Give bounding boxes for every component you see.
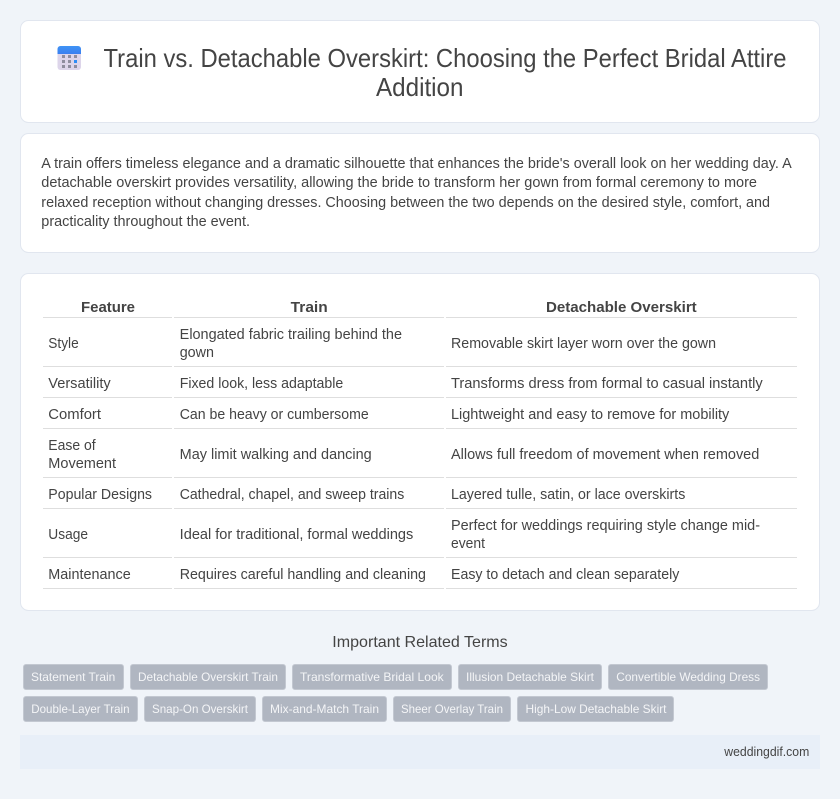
- tag: convertible wedding dress: [608, 664, 768, 690]
- icon: calendar: [58, 46, 81, 70]
- row: ease of movement: Movement: [48, 456, 116, 472]
- tag: illusion detachable skirt: Illusion Detachable Skirt: [466, 670, 595, 684]
- tag: transformative bridal look: Transformative Bridal Look: [300, 670, 445, 684]
- tag: detachable overskirt train: [130, 664, 286, 690]
- tag: high-low detachable skirt: [518, 696, 674, 722]
- row: comfort: [43, 407, 797, 429]
- row: usage: Perfect for weddings requiring style change mid-: [451, 518, 760, 534]
- row: versatility: Transforms dress from formal to casual instantly: [451, 376, 764, 392]
- title: [104, 45, 786, 102]
- intro text block: detachable overskirt provides versatility, allowing the bride to transform her gown from formal ceremony to more: [41, 175, 757, 191]
- row: style: Style: [48, 336, 79, 352]
- tag: statement train: Statement Train: [31, 670, 115, 684]
- row: popular designs: Layered tulle, satin, or lace overskirts: [451, 487, 685, 503]
- row: ease of movement: Ease of: [48, 438, 97, 454]
- row: versatility: Fixed look, less adaptable: [180, 376, 343, 392]
- tag: statement train: [24, 664, 124, 690]
- row: usage: Usage: [48, 527, 88, 543]
- intro text block: A train offers timeless elegance and a dramatic silhouette that enhances the bride's overall look on her wedding day. A: [41, 156, 792, 172]
- row: versatility: [43, 376, 797, 398]
- tag list: [24, 664, 768, 722]
- intro text block: relaxed reception without changing dresses. Choosing between the two depends on the desired style, comfort, and: [41, 195, 770, 211]
- row: ease of movement: Allows full freedom of movement when removed: [451, 447, 759, 463]
- title: Train vs. Detachable Overskirt: Choosing the Perfect Bridal Attire: [104, 45, 786, 73]
- table header row: Train: [291, 300, 328, 316]
- intro text block: practicality throughout the event.: [41, 214, 250, 230]
- title: Addition: [376, 74, 464, 102]
- tag: mix-and-match train: [262, 696, 386, 722]
- row: comfort: Comfort: [48, 407, 101, 423]
- panel: comparison table: [20, 274, 820, 610]
- row: maintenance: Easy to detach and clean separately: [451, 567, 680, 583]
- row: maintenance: Requires careful handling and cleaning: [180, 567, 426, 583]
- tag: double-layer train: Double-Layer Train: [31, 702, 129, 716]
- tag: mix-and-match train: Mix-and-Match Train: [270, 702, 379, 716]
- table header row: [43, 300, 797, 318]
- row: popular designs: Popular Designs: [48, 487, 152, 503]
- tag: high-low detachable skirt: High-Low Detachable Skirt: [526, 702, 667, 716]
- footer source text: weddingdif.com: [723, 744, 809, 759]
- tag: snap-on overskirt: Snap-On Overskirt: [152, 702, 249, 716]
- row: usage: event: [451, 536, 485, 552]
- heading: important related terms: Important Related Terms: [332, 634, 508, 651]
- row: style: [43, 327, 797, 367]
- intro text block: [41, 156, 792, 230]
- row: maintenance: [43, 567, 797, 589]
- tag: snap-on overskirt: [144, 696, 256, 722]
- tag: illusion detachable skirt: [458, 664, 602, 690]
- row: usage: [43, 518, 797, 558]
- row: maintenance: Maintenance: [48, 567, 131, 583]
- footer bar: [20, 735, 820, 769]
- tag: double-layer train: [24, 696, 138, 722]
- row: versatility: Versatility: [48, 376, 112, 392]
- tag: detachable overskirt train: Detachable Overskirt Train: [138, 670, 278, 684]
- row: comfort: Can be heavy or cumbersome: [180, 407, 369, 423]
- table header row: Detachable Overskirt: [546, 300, 697, 316]
- header panel: [20, 20, 820, 122]
- row: style: Elongated fabric trailing behind the: [180, 327, 402, 343]
- row: popular designs: Cathedral, chapel, and sweep trains: [180, 487, 404, 503]
- row: style: gown: [180, 345, 214, 361]
- row: ease of movement: [43, 438, 797, 478]
- tag: sheer overlay train: Sheer Overlay Train: [401, 702, 503, 716]
- row: comfort: Lightweight and easy to remove for mobility: [451, 407, 730, 423]
- tag: transformative bridal look: [292, 664, 452, 690]
- row: popular designs: [43, 487, 797, 509]
- row: style: Removable skirt layer worn over the gown: [451, 336, 716, 352]
- row: ease of movement: May limit walking and dancing: [180, 447, 372, 463]
- row: usage: Ideal for traditional, formal weddings: [180, 527, 413, 543]
- tag: convertible wedding dress: Convertible Wedding Dress: [616, 670, 760, 684]
- panel: introduction: [20, 134, 820, 252]
- tag: sheer overlay train: [394, 696, 510, 722]
- table header row: Feature: [81, 300, 135, 316]
